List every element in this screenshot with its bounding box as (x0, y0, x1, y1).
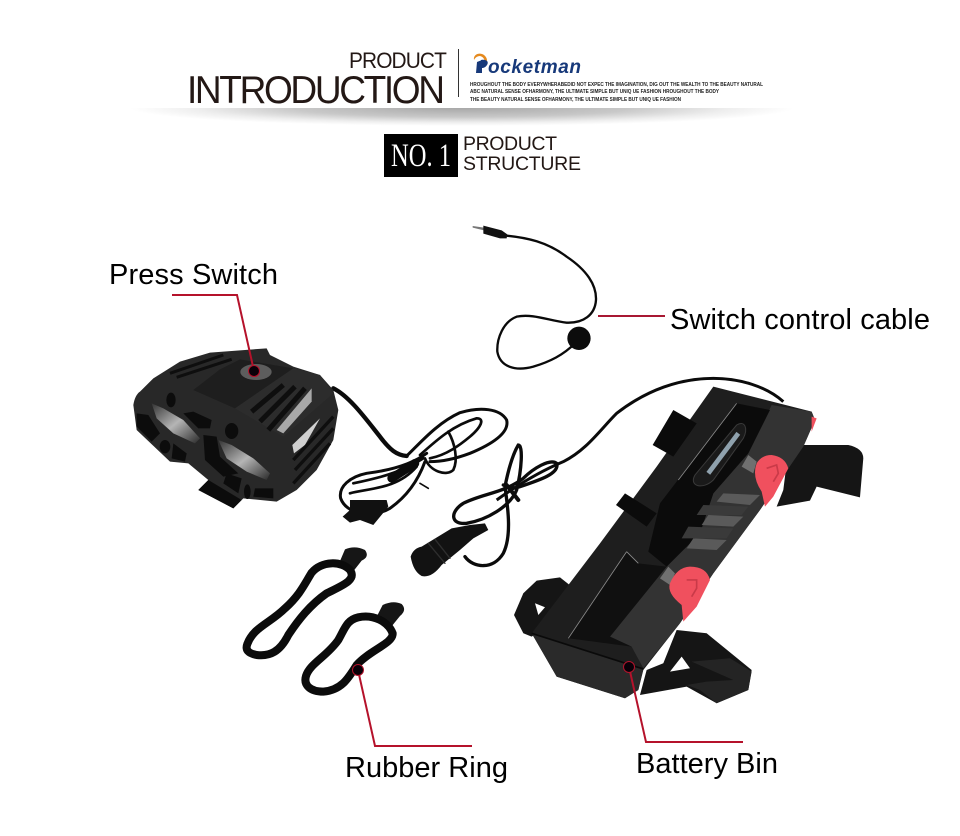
battery stripes (687, 493, 760, 550)
section title: product structure (463, 133, 581, 175)
red clip tip (812, 417, 817, 432)
rubber rings (247, 547, 404, 692)
top ribs (170, 355, 232, 377)
switch control cable (473, 226, 596, 369)
callout line: switch control cable (598, 315, 665, 317)
header shadow band (130, 108, 794, 144)
heading: product introduction: PRODUCT (349, 49, 447, 73)
header divider (458, 49, 459, 97)
red clip lower (669, 567, 710, 622)
battery window (693, 424, 746, 486)
battery side face (610, 405, 815, 668)
lens right (218, 440, 270, 480)
brand tagline text: HROUGHOUT THE BODY EVERYWHERABEDID NOT EXPEC THE IMAGINATION, DIG OUT THE WEALTH TO THE BEAUTY NATURAL (470, 82, 764, 88)
headlamp cable and connector (333, 388, 507, 525)
clip straps (660, 455, 757, 585)
power button (240, 364, 272, 380)
side vents (277, 388, 312, 433)
section badge: NO. 1: NO. 1 (391, 138, 451, 174)
label: rubber ring: Rubber Ring (345, 752, 508, 784)
label: switch control cable: Switch control cable (670, 304, 930, 336)
callout line: battery bin (624, 662, 743, 742)
rubber ring two (305, 602, 404, 692)
headlamp (133, 348, 338, 508)
brand tagline text: ABC NATURAL SENSE OFHARMONY, THE ULTIMATE SIMPLE BUT UNIQ UE FASHION HROUGHOUT THE BODY (470, 89, 719, 95)
heading: product introduction (187, 49, 447, 112)
headlamp top panel (193, 359, 293, 408)
callout line: press switch (172, 295, 260, 376)
lens left (152, 403, 200, 443)
battery straps (514, 445, 863, 703)
battery front face (532, 633, 643, 698)
rubber ring one (247, 547, 367, 655)
upper strap (777, 445, 863, 507)
section badge: NO. 1 (384, 134, 458, 177)
battery outer shell (532, 387, 815, 698)
lower strap (640, 630, 752, 703)
lamp dark facets (137, 393, 273, 508)
red clip upper (755, 455, 788, 507)
battery mount tabs (616, 410, 697, 527)
section title: product structure: PRODUCT (463, 133, 557, 155)
connector cable loop (411, 445, 557, 576)
section title: product structure: STRUCTURE (463, 153, 581, 175)
headlamp body (133, 348, 338, 508)
battery cable (497, 378, 783, 500)
waterproof connector (411, 523, 488, 576)
label: press switch: Press Switch (109, 259, 278, 291)
rear strap (514, 577, 572, 637)
label: battery bin: Battery Bin (636, 748, 778, 780)
heading: product introduction: INTRODUCTION (187, 69, 445, 112)
brand tagline text: THE BEAUTY NATURAL SENSE OFHARMONY, THE ULTIMATE SIMPLE BUT UNIQ UE FASHION (470, 97, 681, 103)
logo: Pocketman: ocketman (488, 57, 581, 78)
callout line: rubber ring (352, 664, 472, 746)
battery top dark panels (648, 403, 770, 567)
battery bin (532, 387, 817, 698)
brand tagline text (470, 82, 764, 103)
